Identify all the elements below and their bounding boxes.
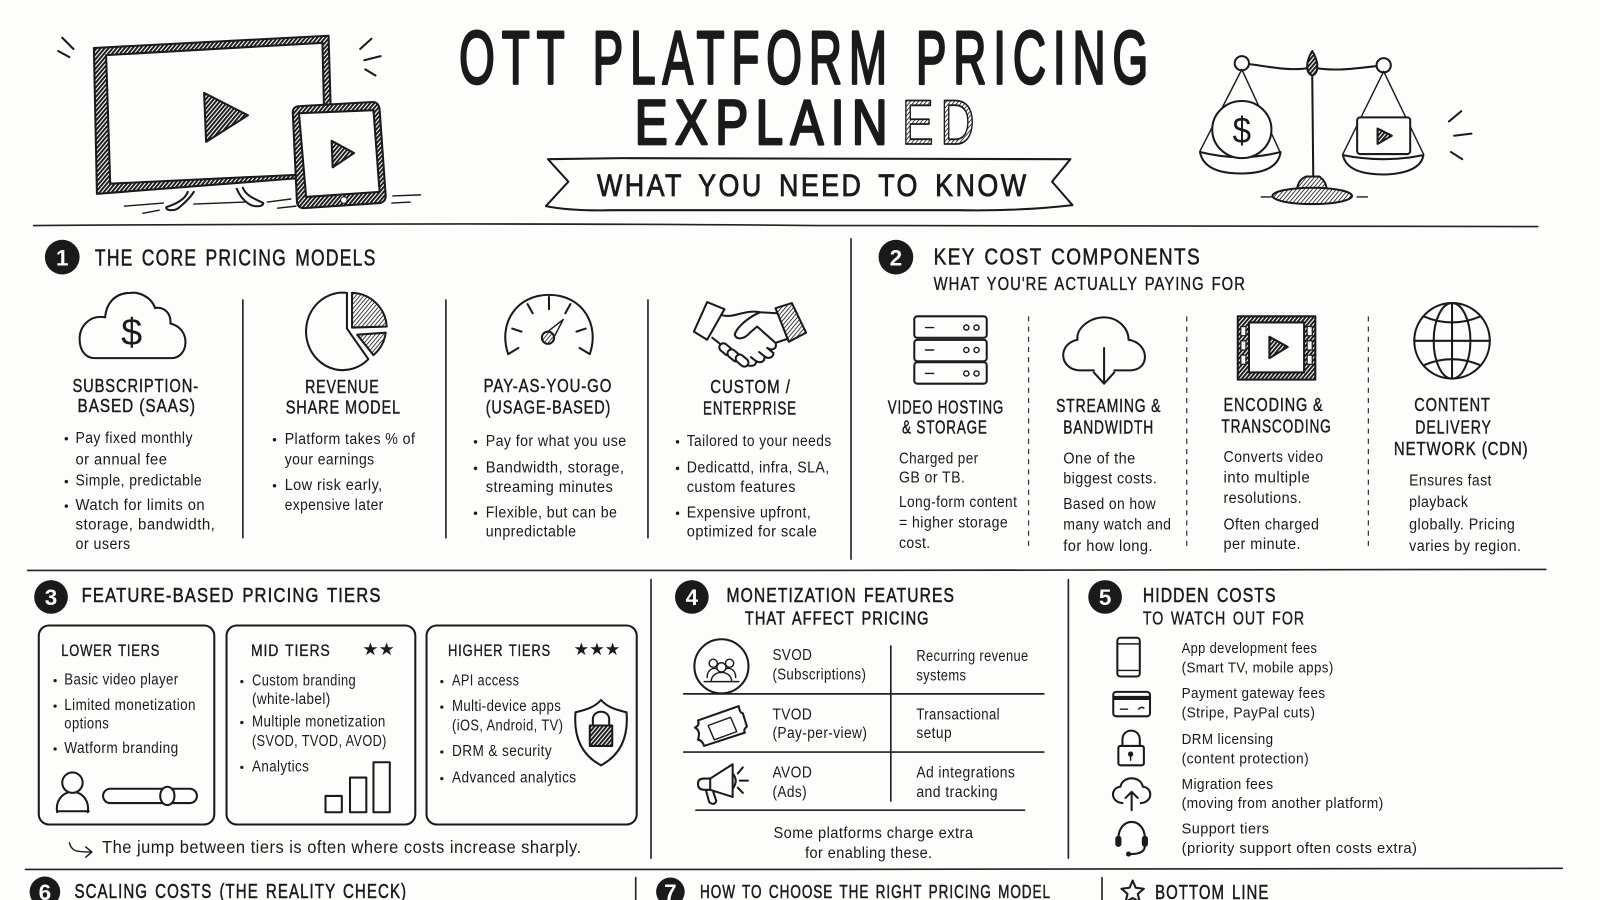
card: higher tiers: HIGHER TIERS <box>448 641 551 660</box>
subscription model: BASED (SAAS) <box>78 395 196 416</box>
title: ED <box>902 88 982 158</box>
streaming and bandwidth: biggest costs. <box>1063 471 1157 488</box>
icon: ticket <box>695 706 747 746</box>
revenue share model: Low risk early, <box>285 477 383 494</box>
heading 2 <box>879 240 1246 294</box>
heading 1 <box>45 240 377 274</box>
panel 4: monetization features <box>675 580 1044 862</box>
streaming and bandwidth: for how long. <box>1063 538 1153 555</box>
card: mid tiers: Analytics <box>252 758 309 775</box>
subscription model <box>65 293 215 553</box>
streaming and bandwidth <box>1056 317 1171 555</box>
encoding and transcoding: Converts video <box>1223 449 1323 466</box>
video hosting: & STORAGE <box>902 417 988 438</box>
revenue share model: Platform takes % of <box>285 431 415 448</box>
card: mid tiers: (white-label) <box>252 691 331 708</box>
heading 5: TO WATCH OUT FOR <box>1143 607 1305 628</box>
icon: shield with lock <box>575 700 627 765</box>
custom enterprise: ENTERPRISE <box>703 397 797 418</box>
content delivery network <box>1394 303 1529 555</box>
row: AVOD: AVOD <box>772 765 812 782</box>
item: DRM licensing: (content protection) <box>1182 751 1309 767</box>
row: AVOD: and tracking <box>916 784 998 801</box>
revenue share model: expensive later <box>285 497 384 514</box>
heading 5: 5 <box>1099 585 1111 610</box>
revenue share model <box>273 293 415 514</box>
note: extra charges <box>773 825 973 862</box>
row: AVOD <box>698 764 1015 804</box>
note: extra charges: Some platforms charge extra <box>773 825 973 842</box>
icon: headset <box>1115 822 1148 857</box>
panel 7: how to choose <box>656 878 1051 900</box>
video hosting: cost. <box>899 535 931 552</box>
heading 2: 2 <box>890 245 902 270</box>
subscription model: or annual fee <box>76 451 167 468</box>
banner: what you need to know: WHAT YOU NEED TO KNOW <box>597 167 1029 203</box>
card: mid tiers: (SVOD, TVOD, AVOD) <box>252 733 387 750</box>
icon: user and slider <box>57 772 197 812</box>
header <box>58 17 1471 213</box>
icon: film strip <box>1238 316 1315 380</box>
heading 2: KEY COST COMPONENTS <box>934 243 1201 269</box>
banner: what you need to know <box>546 158 1072 210</box>
subscription model: Watch for limits on <box>76 497 205 514</box>
content delivery network: globally. Pricing <box>1409 517 1515 534</box>
row: TVOD <box>695 706 1000 746</box>
item: migration fees <box>1113 777 1384 812</box>
revenue share model: REVENUE <box>305 376 380 397</box>
pay-as-you-go: unpredictable <box>486 524 577 541</box>
heading 5: HIDDEN COSTS <box>1143 585 1277 607</box>
card: lower tiers: options <box>64 716 109 733</box>
icon: megaphone <box>698 764 748 804</box>
video hosting: Charged per <box>899 450 979 467</box>
row: SVOD: Recurring revenue <box>916 648 1029 665</box>
revenue share model: your earnings <box>285 451 374 468</box>
panel 3: feature-based pricing tiers <box>34 580 637 857</box>
row: SVOD <box>694 639 1029 693</box>
item: support tiers: Support tiers <box>1182 822 1269 838</box>
pay-as-you-go <box>474 295 627 541</box>
note: extra charges: for enabling these. <box>805 845 933 862</box>
heading 4 <box>675 580 955 628</box>
icon: balance scale with money and video: $ <box>1233 110 1251 151</box>
card: mid tiers <box>227 626 415 824</box>
video hosting: VIDEO HOSTING <box>888 396 1004 417</box>
panel 1: core pricing models <box>45 240 832 553</box>
title: EXPLAIN <box>635 88 895 158</box>
subscription model: storage, bandwidth, <box>76 517 215 534</box>
heading 3 <box>34 580 382 614</box>
heading 4: MONETIZATION FEATURES <box>727 585 955 607</box>
heading 4: 4 <box>686 585 699 610</box>
custom enterprise: Tailored to your needs <box>687 433 832 450</box>
card: mid tiers: MID TIERS <box>251 641 331 660</box>
streaming and bandwidth: One of the <box>1063 450 1136 467</box>
content delivery network: DELIVERY <box>1415 417 1492 438</box>
item: payment gateway: Payment gateway fees <box>1182 686 1326 702</box>
heading 5 <box>1088 580 1305 628</box>
item: migration fees: (moving from another platform) <box>1182 796 1384 812</box>
streaming and bandwidth: STREAMING & <box>1056 395 1161 416</box>
icon: pie chart <box>306 293 387 370</box>
card: higher tiers: ★★★ <box>573 640 620 660</box>
icon: phone <box>1117 638 1140 677</box>
icon: handshake <box>694 302 806 368</box>
panel 2: key cost components <box>879 240 1529 555</box>
encoding and transcoding: per minute. <box>1223 536 1301 553</box>
item: DRM licensing <box>1118 731 1309 767</box>
custom enterprise: optimized for scale <box>687 524 817 541</box>
custom enterprise: CUSTOM / <box>710 376 791 397</box>
icon: audience circle <box>694 639 748 693</box>
icon: bar chart <box>326 762 390 812</box>
streaming and bandwidth: Based on how <box>1063 496 1156 513</box>
row: AVOD: (Ads) <box>772 784 807 801</box>
content delivery network: Ensures fast <box>1409 473 1492 490</box>
title: OTT PLATFORM PRICING <box>459 17 1155 101</box>
video hosting: GB or TB. <box>899 470 965 487</box>
pay-as-you-go: Pay for what you use <box>486 433 627 450</box>
row: TVOD: (Pay-per-view) <box>772 725 867 742</box>
item: payment gateway <box>1113 686 1326 721</box>
pay-as-you-go: PAY-AS-YOU-GO <box>484 375 612 396</box>
row: SVOD: SVOD <box>772 647 812 664</box>
encoding and transcoding: TRANSCODING <box>1221 416 1332 437</box>
pay-as-you-go: Bandwidth, storage, <box>486 459 624 476</box>
callout: tier jump: The jump between tiers is often where costs increase sharply. <box>102 837 582 857</box>
panel: bottom line <box>1121 881 1269 900</box>
row: TVOD: Transactional <box>916 706 1000 723</box>
heading 3: FEATURE-BASED PRICING TIERS <box>82 585 382 607</box>
encoding and transcoding: resolutions. <box>1223 490 1302 507</box>
content delivery network: NETWORK (CDN) <box>1394 438 1529 459</box>
item: payment gateway: (Stripe, PayPal cuts) <box>1182 705 1315 721</box>
card: lower tiers: Watform branding <box>64 740 179 757</box>
card: mid tiers: Multiple monetization <box>252 714 386 731</box>
custom enterprise: custom features <box>687 479 796 496</box>
icon: balance scale with money and video <box>1200 51 1471 204</box>
card: lower tiers: Limited monetization <box>64 697 196 714</box>
header divider <box>34 224 1538 227</box>
panel 5: hidden costs <box>1088 580 1417 857</box>
card: higher tiers: (iOS, Android, TV) <box>452 718 563 735</box>
encoding and transcoding <box>1221 316 1332 553</box>
card: lower tiers <box>39 626 214 824</box>
video hosting <box>888 316 1017 552</box>
item: app development <box>1117 638 1334 677</box>
subscription model: or users <box>76 536 131 553</box>
streaming and bandwidth: many watch and <box>1063 517 1171 534</box>
icon: padlock <box>1118 731 1144 765</box>
card: higher tiers: DRM & security <box>452 743 552 760</box>
item: support tiers <box>1115 822 1417 857</box>
item: app development: (Smart TV, mobile apps) <box>1182 660 1334 676</box>
icon: globe <box>1414 303 1490 379</box>
title <box>459 17 1155 158</box>
item: app development: App development fees <box>1182 641 1317 657</box>
item: support tiers: (priority support often costs extra) <box>1182 841 1417 857</box>
custom enterprise: Expensive upfront, <box>687 504 811 521</box>
card: higher tiers <box>427 626 637 824</box>
card: lower tiers: Basic video player <box>64 672 179 689</box>
pay-as-you-go: streaming minutes <box>486 479 613 496</box>
icon: cloud upload <box>1113 778 1150 810</box>
icon: server stack <box>914 316 987 384</box>
item: migration fees: Migration fees <box>1182 777 1273 793</box>
row: AVOD: Ad integrations <box>916 765 1015 782</box>
subscription model: Pay fixed monthly <box>76 430 193 447</box>
pay-as-you-go: (USAGE-BASED) <box>486 396 611 417</box>
card: higher tiers: Advanced analytics <box>452 770 577 787</box>
heading 1: 1 <box>56 245 68 270</box>
icon: cloud with dollar <box>80 293 185 358</box>
card: mid tiers: Custom branding <box>252 673 356 690</box>
card: lower tiers: LOWER TIERS <box>61 641 160 660</box>
heading 4: THAT AFFECT PRICING <box>745 607 930 628</box>
subscription model: Simple, predictable <box>76 473 202 490</box>
item: DRM licensing: DRM licensing <box>1182 732 1273 748</box>
content delivery network: playback <box>1409 494 1468 511</box>
pay-as-you-go: Flexible, but can be <box>486 504 617 521</box>
heading 1: THE CORE PRICING MODELS <box>95 244 377 270</box>
video hosting: = higher storage <box>899 515 1008 532</box>
card: higher tiers: API access <box>452 673 519 690</box>
heading 3: 3 <box>45 585 57 610</box>
card: mid tiers: ★★ <box>362 640 395 660</box>
streaming and bandwidth: BANDWIDTH <box>1063 417 1154 438</box>
card: higher tiers: Multi-device apps <box>452 698 561 715</box>
icon: card <box>1113 692 1150 716</box>
custom enterprise: Dedicattd, infra, SLA, <box>687 459 830 476</box>
content delivery network: CONTENT <box>1414 394 1491 415</box>
content delivery network: varies by region. <box>1409 538 1521 555</box>
custom enterprise <box>676 302 832 541</box>
encoding and transcoding: Often charged <box>1223 517 1319 534</box>
panel 6: scaling costs <box>30 877 407 900</box>
icon: TV and tablet with play buttons <box>58 36 420 213</box>
row: TVOD: TVOD <box>772 706 812 723</box>
icon: cloud with dollar: $ <box>121 311 142 353</box>
encoding and transcoding: into multiple <box>1223 470 1310 487</box>
row: TVOD: setup <box>916 725 952 742</box>
subscription model: SUBSCRIPTION- <box>72 375 199 396</box>
row: SVOD: (Subscriptions) <box>772 667 866 684</box>
encoding and transcoding: ENCODING & <box>1223 394 1323 415</box>
icon: gauge <box>505 295 593 354</box>
heading 2: WHAT YOU'RE ACTUALLY PAYING FOR <box>934 273 1246 294</box>
revenue share model: SHARE MODEL <box>286 396 401 417</box>
row: SVOD: systems <box>916 668 966 685</box>
icon: cloud download <box>1063 317 1145 384</box>
video hosting: Long-form content <box>899 494 1017 511</box>
